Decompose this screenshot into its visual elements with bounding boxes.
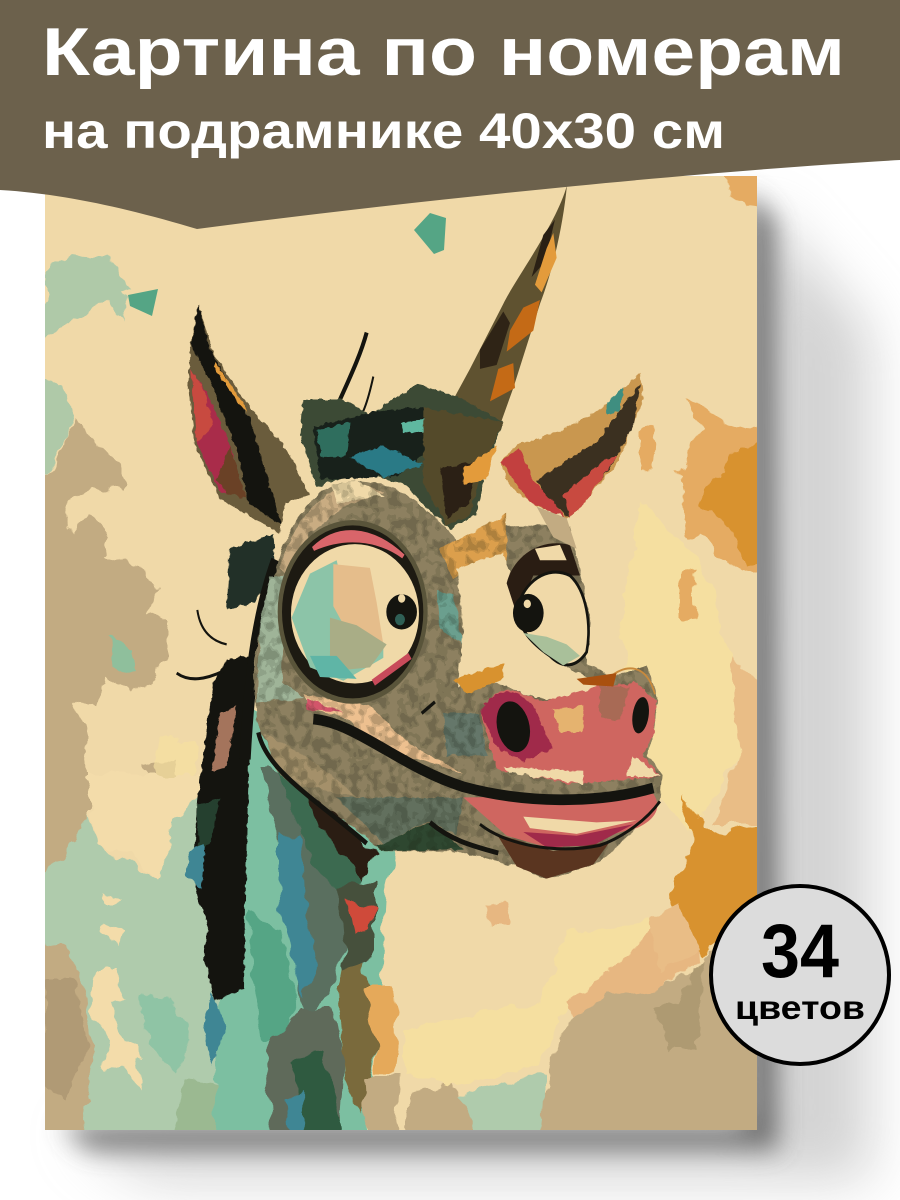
lower lip [463, 794, 657, 879]
eyeball [291, 544, 419, 683]
snout [480, 683, 660, 784]
left ear [188, 304, 310, 533]
jaw crease [430, 822, 498, 853]
nostrils [496, 697, 649, 752]
cheek mark [422, 702, 435, 713]
forehead mane [300, 384, 503, 530]
face [253, 480, 663, 879]
mane strands [177, 333, 373, 759]
chin [497, 834, 610, 879]
eyeball shading [292, 560, 383, 681]
jaw outline [258, 732, 367, 843]
face base [253, 480, 663, 879]
badge circle [711, 886, 889, 1064]
canvas drop shadow [60, 190, 870, 1180]
painting background [45, 176, 757, 1130]
big eye [278, 520, 428, 704]
painting canvas [40, 170, 765, 1140]
brow shading [506, 543, 580, 606]
snout brown accent [577, 673, 617, 687]
lower eye rim [373, 656, 410, 683]
cream muzzle [453, 553, 603, 702]
neck [215, 700, 400, 1140]
mouth line [313, 719, 653, 800]
lower jaw line [480, 801, 660, 849]
badge number: 34 [761, 909, 839, 994]
teal paint spot left [128, 289, 158, 316]
horn [455, 186, 567, 421]
subtitle: на подрамнике 40x30 см [42, 103, 725, 159]
badge: colour count [711, 886, 889, 1064]
header banner [0, 0, 900, 229]
teal paint spot [414, 213, 446, 254]
eye pink brow [313, 532, 403, 556]
face colour patches [280, 484, 383, 576]
badge label: цветов [735, 989, 865, 1026]
small eye [507, 507, 588, 665]
pupil [513, 594, 544, 632]
background paint patches [40, 170, 765, 1140]
left mane [185, 533, 277, 1065]
title: Картина по номерам [42, 14, 845, 90]
eyeball [518, 572, 588, 665]
right ear [500, 373, 643, 518]
pupil [386, 594, 417, 630]
unicorn [177, 185, 663, 1065]
snout top outline [610, 668, 655, 694]
outer eye socket [278, 520, 428, 704]
